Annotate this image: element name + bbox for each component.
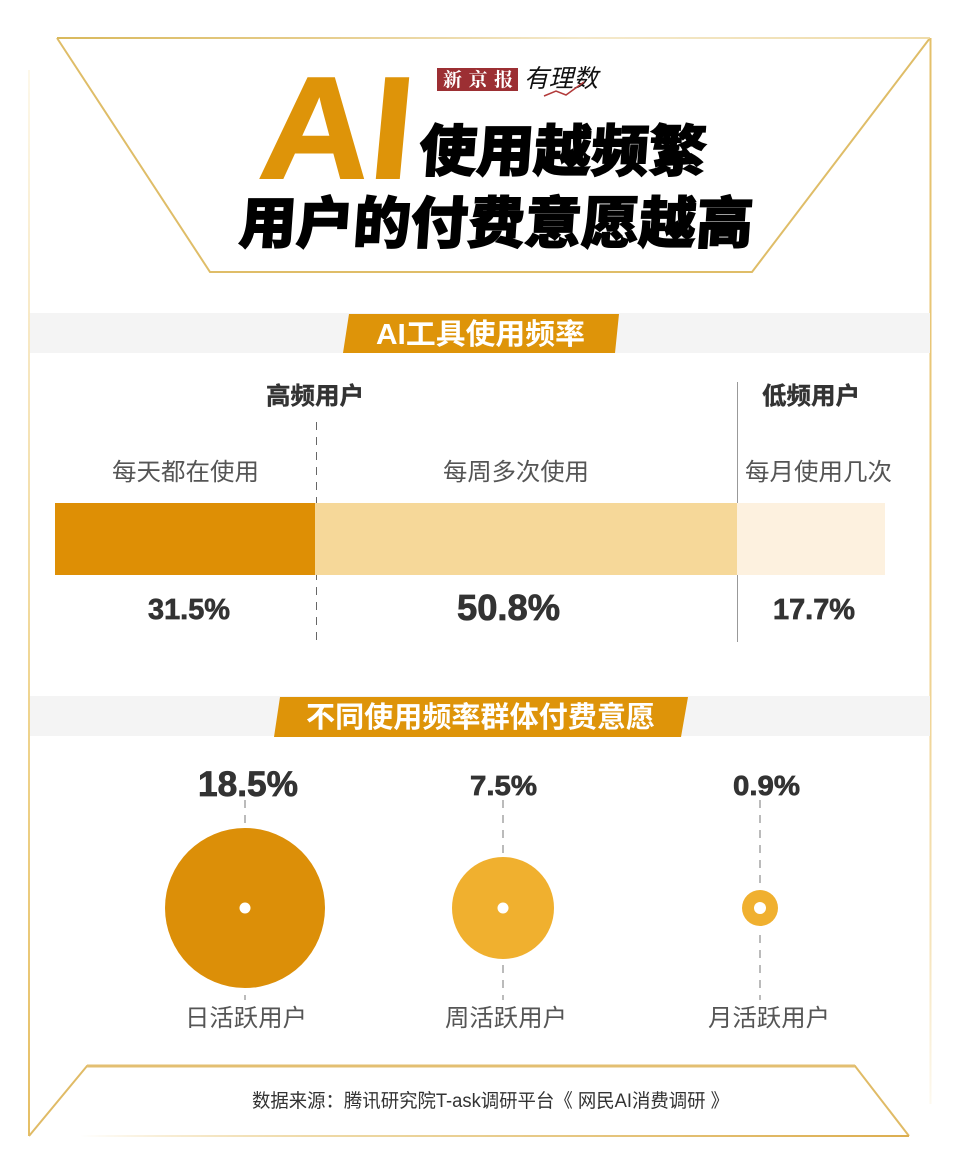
title frame [57,38,930,272]
value: 50.8%: 50.8% [457,587,560,628]
source panel frame [29,1066,909,1136]
stacked bar [55,503,885,575]
value: 17.7%: 17.7% [773,594,855,626]
label: 每天都在使用: 每天都在使用 [112,459,259,486]
title line 1: 使用越频繁 [417,120,709,183]
label: 月活跃用户: 月活跃用户 [708,1005,830,1032]
label: 高频用户: 高频用户 [266,383,364,410]
value: 18.5%: 18.5% [198,765,298,804]
logo: 新京报 有理数: 有理数 [524,65,601,93]
section band 1 [30,313,930,353]
section heading tag: AI工具使用频率 [343,314,619,353]
label: 周活跃用户: 周活跃用户 [445,1005,567,1032]
source text: 数据来源：腾讯研究院T-ask调研平台《 网民AI消费调研 》 [252,1090,729,1112]
label: 日活跃用户: 日活跃用户 [185,1005,307,1032]
value: 7.5%: 7.5% [470,770,537,801]
label: 每月使用几次: 每月使用几次 [745,459,892,486]
section heading tag: 不同使用频率群体付费意愿 [274,697,688,737]
value: 0.9%: 0.9% [733,770,800,801]
circle group: daily users [165,765,325,1032]
logo: 新京报 有理数: 新京报 [443,68,513,91]
logo: 新京报 有理数 [437,65,601,96]
circle group: weekly users [445,770,567,1032]
title line 2: 用户的付费意愿越高 [237,192,756,255]
group divider solid [736,382,738,642]
label: 低频用户: 低频用户 [762,383,860,410]
section band 2 [30,696,930,737]
circle group: monthly users [708,770,830,1032]
title: AI: AI [254,46,421,209]
section heading tag: AI工具使用频率: AI工具使用频率 [376,318,585,351]
value: 31.5%: 31.5% [148,594,230,626]
section heading tag: 不同使用频率群体付费意愿: 不同使用频率群体付费意愿 [306,701,655,734]
group divider dashed [316,422,318,642]
label: 每周多次使用: 每周多次使用 [443,459,589,486]
